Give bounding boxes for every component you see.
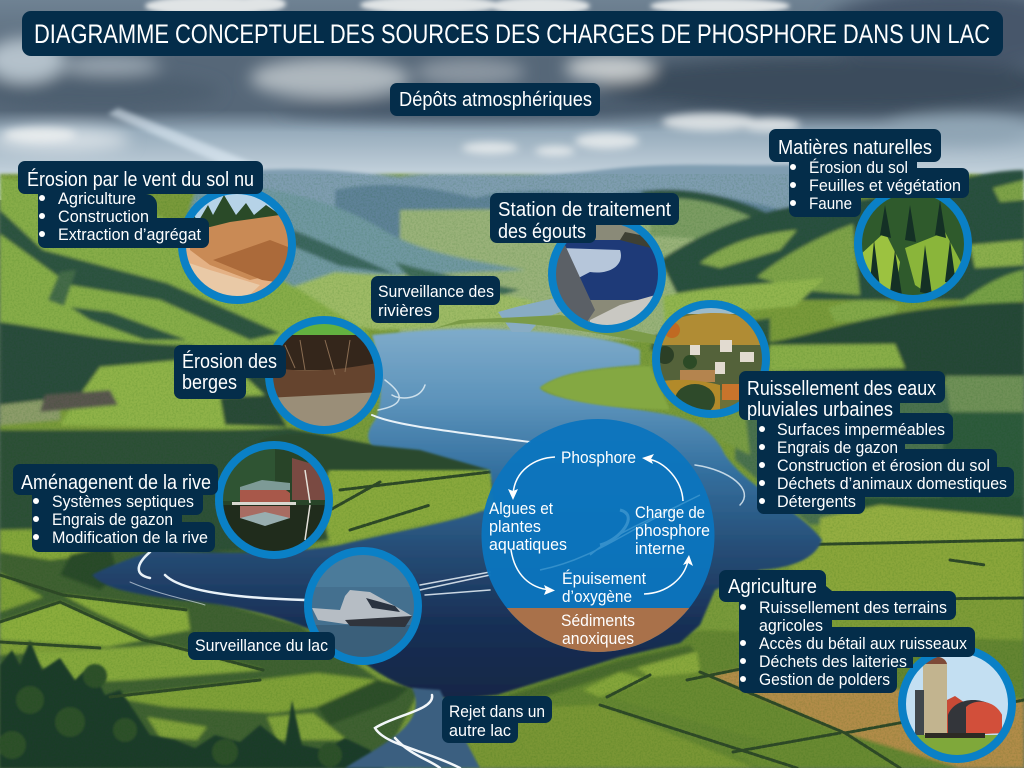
- callout: agriculture: Déchets des laiteries: [759, 652, 907, 671]
- callout: shoreline development: Engrais de gazon: [52, 510, 173, 529]
- callout: urban stormwater runoff: Construction et érosion du sol: [777, 456, 990, 475]
- callout: natural materials: Faune: [809, 194, 852, 213]
- label: anoxic sediments: anoxiques: [562, 629, 634, 648]
- photo: urban neighbourhood: [652, 300, 770, 418]
- title banner: [22, 11, 1003, 56]
- label: atmospheric deposition: Dépôts atmosphériques: [399, 89, 592, 111]
- callout: agriculture: agricoles: [759, 616, 823, 635]
- peninsula: [540, 366, 670, 410]
- label: algae and aquatic plants: [489, 499, 567, 554]
- callout: wind erosion: Érosion par le vent du sol nu: [27, 168, 254, 191]
- callout: lake monitoring: Surveillance du lac: [195, 636, 328, 655]
- callout: wind erosion: Agriculture: [58, 189, 136, 208]
- callout: wind erosion: [18, 161, 263, 248]
- arrow: internal load to phosphorus: [642, 454, 683, 501]
- callout: urban stormwater runoff: pluviales urbaines: [747, 399, 893, 421]
- callout: natural materials: Matières naturelles: [778, 137, 932, 159]
- label: anoxic sediments: [561, 611, 635, 648]
- callout: discharge to another lake: Rejet dans un: [449, 702, 545, 721]
- callout: urban stormwater runoff: Déchets d’animaux domestiques: [777, 474, 1007, 493]
- right forests: [660, 170, 1024, 300]
- valley pasture: [400, 208, 760, 340]
- photo: forest: [854, 198, 972, 303]
- callout: urban stormwater runoff: Surfaces imperméables: [777, 420, 945, 439]
- callout: urban stormwater runoff: Engrais de gazon: [777, 438, 898, 457]
- callout: agriculture: Gestion de polders: [759, 670, 890, 689]
- callout: lake monitoring: [188, 632, 335, 660]
- shore trees band: [260, 434, 490, 470]
- callout: urban stormwater runoff: Détergents: [777, 492, 856, 511]
- photo: wind erosion: [178, 186, 296, 304]
- photo: farm: [898, 645, 1016, 763]
- callout: discharge to another lake: autre lac: [449, 721, 511, 740]
- callout: shoreline development: Aménagenent de la rive: [21, 472, 211, 494]
- label: anoxic sediments: Sédiments: [561, 611, 635, 630]
- photo: shoreline development: [215, 441, 333, 559]
- label: oxygen depletion: [562, 569, 646, 606]
- landscape grain: [0, 174, 1024, 768]
- callout: wind erosion: Construction: [58, 207, 149, 226]
- photo: sewage treatment plant: [548, 215, 666, 333]
- tree masses: [0, 640, 385, 768]
- sediment layer: [507, 608, 689, 652]
- hazy left hill: [180, 178, 525, 300]
- left pasture: [0, 178, 372, 360]
- callout: river monitoring: Surveillance des: [378, 282, 494, 301]
- label: internal phosphorus load: interne: [635, 539, 685, 558]
- callout: urban stormwater runoff: Ruissellement des eaux: [747, 378, 936, 400]
- label: internal phosphorus load: Charge de: [635, 503, 705, 522]
- photo: patrol boat: [304, 547, 422, 665]
- callout: agriculture: Ruissellement des terrains: [759, 598, 947, 617]
- central cycle diagram: [480, 419, 720, 658]
- label: oxygen depletion: Épuisement: [562, 569, 646, 588]
- callout: natural materials: Feuilles et végétation: [809, 176, 961, 195]
- arrow: oxygen depletion to internal load: [644, 555, 693, 594]
- callout: shoreline development: [13, 464, 218, 552]
- callout: natural materials: [769, 129, 969, 217]
- callout: urban stormwater runoff: [739, 371, 1014, 514]
- label: internal phosphorus load: phosphore: [635, 521, 710, 540]
- label: atmospheric deposition: [390, 83, 600, 116]
- callout: natural materials: Érosion du sol: [809, 158, 908, 177]
- hedge lines: [0, 472, 1024, 768]
- left fields by upper arm: [320, 468, 495, 545]
- label: algae and aquatic plants: plantes: [489, 517, 541, 536]
- far mountains: [205, 164, 860, 250]
- callout: discharge to another lake: [442, 696, 552, 743]
- right mid fields: [735, 380, 1024, 525]
- callout: river monitoring: [371, 276, 500, 323]
- callout: agriculture: Accès du bétail aux ruisseaux: [759, 634, 967, 653]
- callout: sewage treatment plant: [490, 193, 679, 243]
- callout: wind erosion: Extraction d’agrégat: [58, 225, 201, 244]
- callout: sewage treatment plant: Station de traitement: [498, 199, 671, 221]
- lower right fields: [420, 630, 1024, 768]
- photo: bank erosion: [265, 316, 383, 434]
- lake: [92, 329, 822, 700]
- background: landscape: [0, 164, 1024, 768]
- water circle: [482, 419, 714, 652]
- callout: agriculture: Agriculture: [728, 576, 817, 598]
- water streaks: [130, 380, 744, 605]
- callout: river monitoring: rivières: [378, 301, 432, 320]
- background: sky and clouds: [0, 0, 1024, 200]
- water reflections: [540, 495, 700, 570]
- callout: bank erosion: Érosion des: [182, 350, 277, 373]
- callout: sewage treatment plant: des égouts: [498, 221, 586, 243]
- callout: bank erosion: berges: [182, 372, 237, 394]
- label: oxygen depletion: d’oxygène: [562, 587, 632, 606]
- callout: shoreline development: Systèmes septiques: [52, 492, 194, 511]
- lower-left fields: [0, 573, 43, 612]
- river: [345, 688, 480, 768]
- arrow: algae to oxygen depletion: [511, 550, 555, 595]
- callout: agriculture: [719, 570, 975, 693]
- callout: bank erosion: [174, 345, 286, 399]
- arrow: phosphorus to algae: [508, 457, 555, 500]
- label: algae and aquatic plants: aquatiques: [489, 535, 567, 554]
- callout: shoreline development: Modification de la rive: [52, 528, 208, 547]
- label: phosphorus: Phosphore: [561, 448, 636, 467]
- label: internal phosphorus load: [635, 503, 710, 558]
- label: algae and aquatic plants: Algues et: [489, 499, 553, 518]
